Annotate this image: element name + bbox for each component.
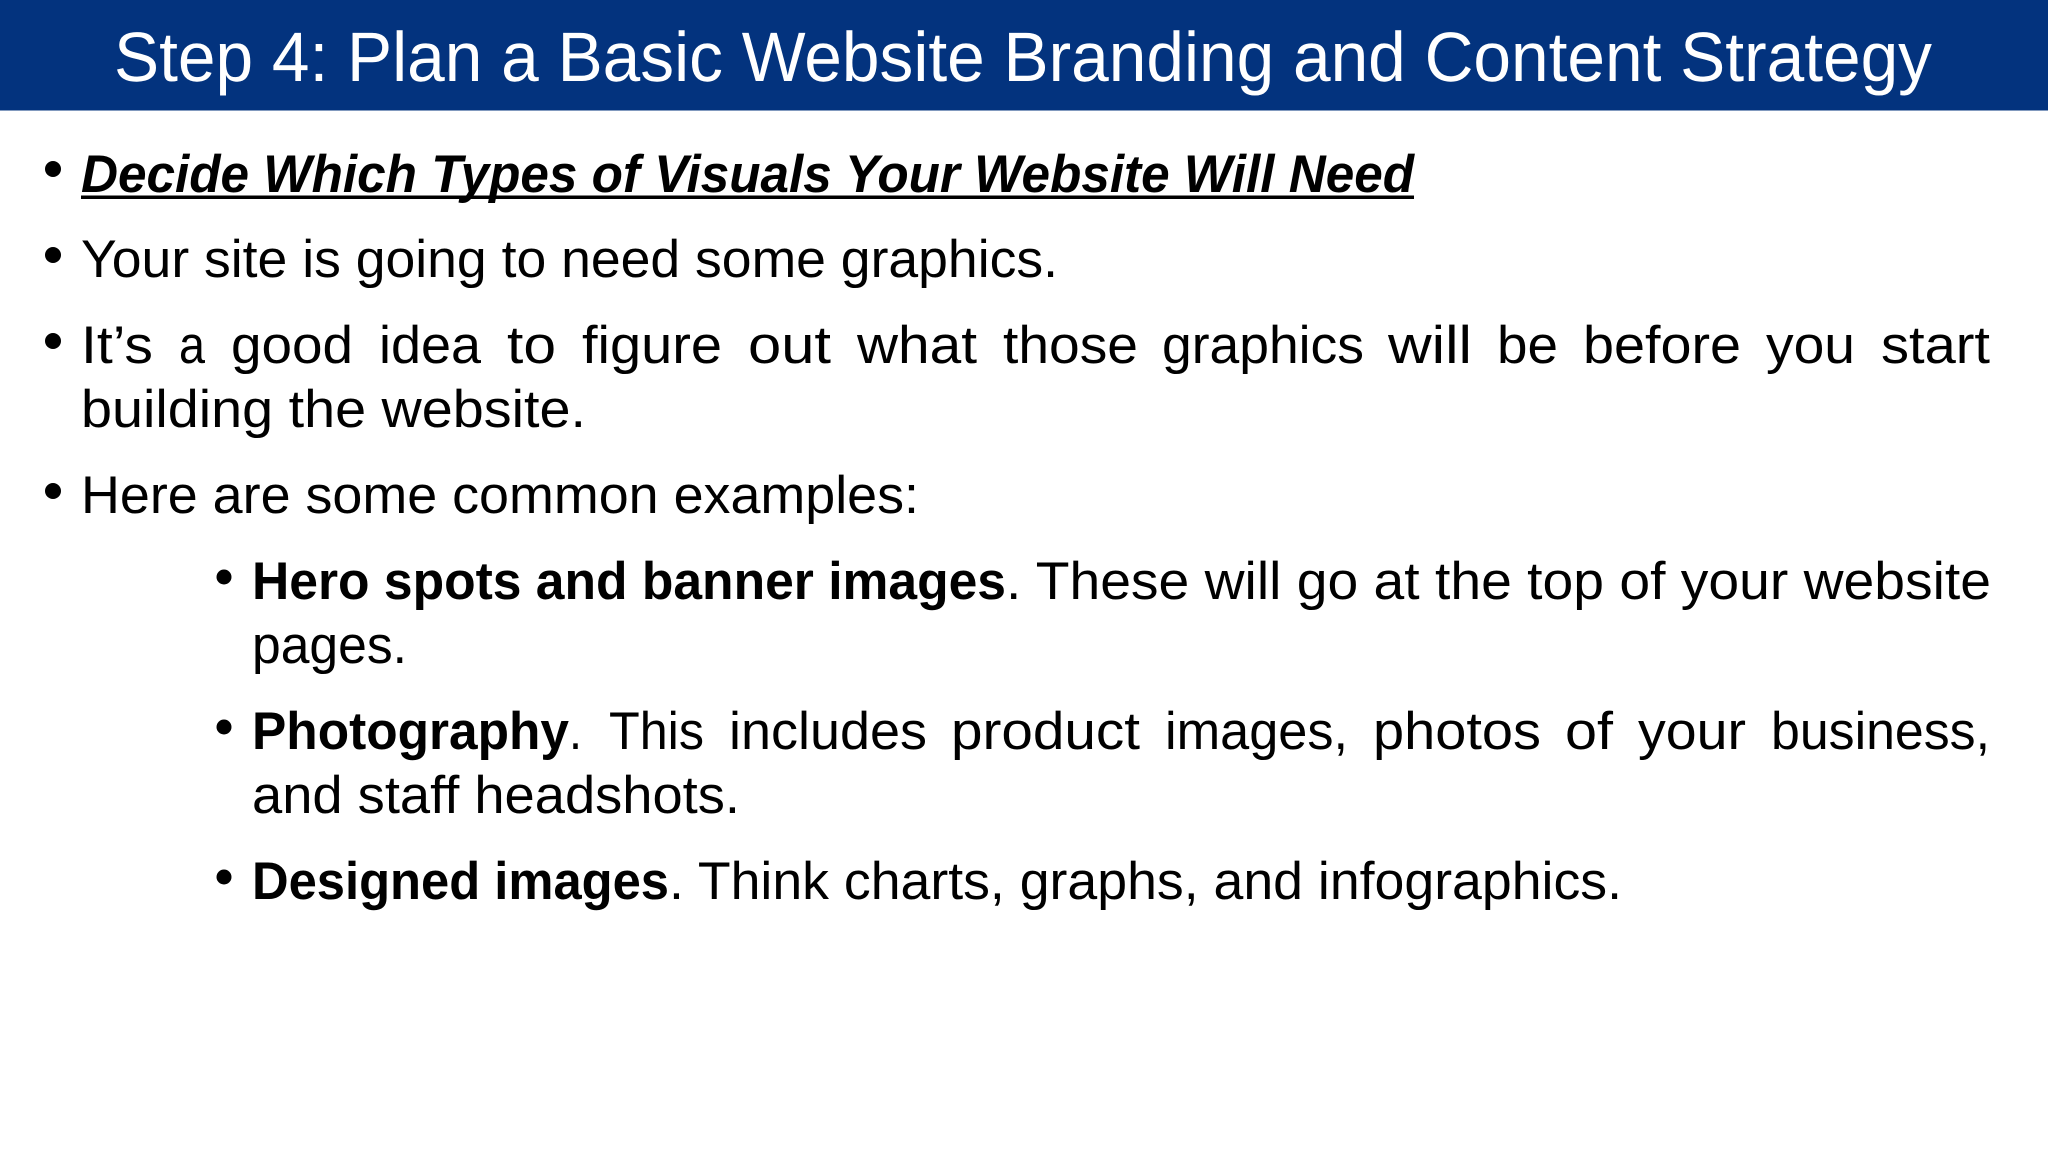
sub-bullet: designed images: [216, 852, 1622, 911]
bullet: graphics needed: Your site is going to need some graphics.: [81, 230, 1058, 289]
sub-bullet: photography: [216, 702, 1990, 825]
bullet: figure out graphics first: It’s: [81, 316, 153, 375]
sub-bullet: photography: photos: [1373, 702, 1541, 761]
sub-bullet: photography: and staff headshots.: [252, 766, 740, 825]
bullet: common examples: Here are some common examples:: [81, 466, 919, 525]
bullet: section heading: Decide Which Types of Visuals Your Website Will Need: [81, 145, 1416, 204]
title banner: [0, 0, 2048, 110]
bullet: figure out graphics first: start: [1881, 316, 1990, 375]
bullet: figure out graphics first: out: [748, 316, 831, 375]
bullet: figure out graphics first: will: [1387, 316, 1472, 375]
sub-bullet: designed images: Designed images: [252, 852, 669, 911]
sub-bullet: photography: includes: [729, 702, 927, 761]
sub-bullet: hero spots and banner images: [216, 552, 1991, 675]
bullet: figure out graphics first: what: [856, 316, 977, 375]
sub-bullet: photography: of: [1565, 702, 1613, 761]
sub-bullet: hero spots and banner images: . These will go at the top of your website: [1006, 552, 1991, 611]
bullet: figure out graphics first: be: [1497, 316, 1558, 375]
bullet: figure out graphics first: idea: [379, 316, 482, 375]
sub-bullet: designed images: . Think charts, graphs, and infographics.: [669, 852, 1622, 911]
bullet: figure out graphics first: you: [1766, 316, 1855, 375]
title: Step 4: Plan a Basic Website Branding and Content Strategy: [114, 18, 1932, 96]
sub-bullet: photography: Photography: [252, 702, 570, 761]
sub-bullet: hero spots and banner images: Hero spots and banner images: [252, 552, 1006, 611]
bullet: figure out graphics first: [45, 316, 1990, 439]
sub-bullet: photography: business,: [1771, 702, 1990, 761]
bullet: figure out graphics first: those: [1003, 316, 1138, 375]
bullet: figure out graphics first: before: [1583, 316, 1741, 375]
sub-bullet: photography: This: [609, 702, 704, 761]
sub-bullet: photography: .: [569, 702, 582, 761]
bullet: figure out graphics first: to: [507, 316, 556, 375]
sub-bullet: photography: your: [1638, 702, 1746, 761]
bullet: figure out graphics first: good: [231, 316, 353, 375]
bullet: figure out graphics first: graphics: [1162, 316, 1364, 375]
sub-bullet: hero spots and banner images: pages.: [252, 616, 407, 675]
bullet: figure out graphics first: a: [179, 316, 205, 375]
bullet: figure out graphics first: building the website.: [81, 380, 586, 439]
bullet: figure out graphics first: figure: [582, 316, 722, 375]
sub-bullet: photography: product: [951, 702, 1140, 761]
sub-bullet: photography: images,: [1165, 702, 1348, 761]
